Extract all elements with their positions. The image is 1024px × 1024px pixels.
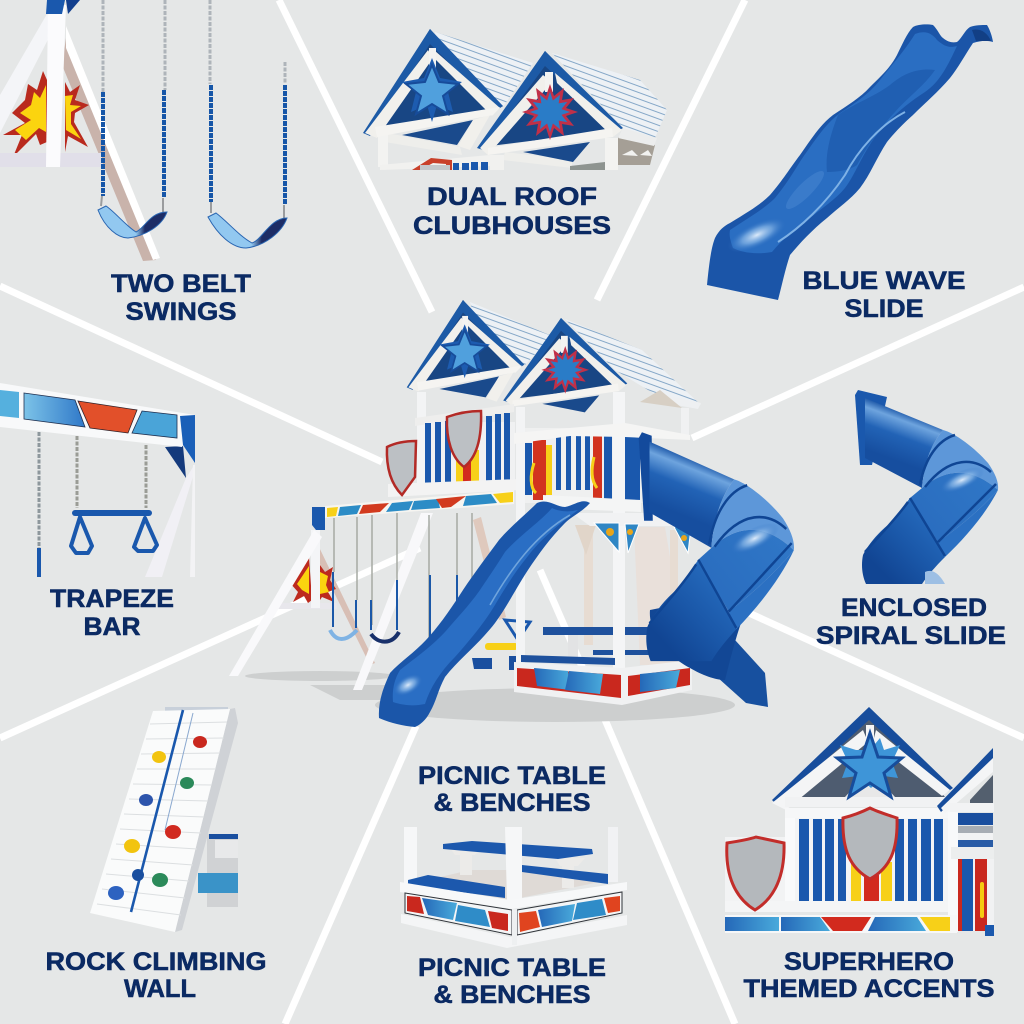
panel: picnic table and benches [400, 762, 627, 1009]
exit chute [717, 625, 768, 707]
trapeze handles and glider [472, 620, 530, 670]
swing frame [229, 513, 506, 690]
left gable [407, 300, 524, 402]
icon: small shield [387, 441, 416, 495]
heading: CLUBHOUSES [413, 212, 611, 240]
icon: comic burst [3, 71, 89, 157]
icon: picnic box [400, 827, 627, 948]
heading: PICNIC TABLE [418, 954, 606, 982]
heading [744, 948, 994, 1003]
right gable [503, 318, 627, 412]
heading [413, 183, 611, 240]
heading: DUAL ROOF [427, 183, 597, 211]
icon: large shield [843, 808, 897, 879]
heading [50, 585, 174, 641]
heading: WALL [124, 975, 196, 1003]
heading: SLIDE [844, 295, 924, 323]
heading: & BENCHES [434, 981, 590, 1009]
icon: right swing [208, 0, 287, 248]
icon: structure behind wall [165, 707, 238, 907]
icon: wave slide [707, 24, 993, 300]
tube [639, 432, 794, 661]
lower coil [650, 600, 742, 680]
right clubhouse walls [514, 392, 691, 692]
panel: dual roof clubhouses [363, 29, 667, 240]
icon: yellow handles [531, 457, 597, 493]
panel: superhero themed accents [725, 707, 994, 1003]
icon: left gable [363, 29, 503, 170]
icon: swing a-frame [0, 0, 160, 261]
heading [111, 270, 251, 326]
icon: wall tops [412, 155, 504, 170]
heading: SWINGS [126, 298, 236, 326]
panel: two belt swings [0, 0, 287, 326]
heading: TWO BELT [111, 270, 251, 298]
icon: climbing wall [90, 708, 238, 932]
heading [418, 762, 606, 817]
icon: beam [0, 383, 195, 577]
icon: gable and slats [725, 707, 959, 912]
left clubhouse walls [387, 392, 520, 497]
heading: PICNIC TABLE [418, 762, 606, 790]
icon: wave slide [379, 501, 590, 727]
ground shadow [245, 671, 735, 722]
icon: right gable [477, 51, 623, 170]
heading: ROCK CLIMBING [46, 948, 266, 976]
icon: pennants [594, 523, 691, 553]
roofs [470, 302, 701, 409]
icon: big shield [447, 411, 481, 467]
icon: back of roofs [435, 32, 667, 165]
icon: spiral slide [639, 432, 794, 707]
panel: trapeze bar [0, 383, 195, 641]
icon: comic band [725, 915, 957, 933]
heading: SUPERHERO [784, 948, 954, 976]
heading: TRAPEZE [50, 585, 174, 613]
main playset illustration [229, 300, 794, 727]
tower back: under deck [543, 525, 688, 665]
heading: ENCLOSED [841, 594, 987, 622]
heading [816, 594, 1006, 650]
heading: & BENCHES [434, 789, 590, 817]
icon: comic burst [290, 557, 336, 603]
beam [312, 490, 514, 530]
icon: right gable [937, 748, 994, 936]
panel: rock climbing wall [46, 707, 266, 1003]
swings [330, 513, 472, 642]
panel: blue wave slide [707, 24, 993, 323]
picnic base [514, 655, 692, 705]
heading: BLUE WAVE [802, 267, 966, 295]
icon: left swing [98, 0, 167, 238]
icon: spiral tube [855, 390, 998, 584]
heading [46, 948, 266, 1003]
heading: SPIRAL SLIDE [816, 622, 1006, 650]
heading: THEMED ACCENTS [744, 975, 994, 1003]
icon: small shield [727, 837, 784, 910]
heading [802, 267, 966, 323]
heading [418, 954, 606, 1009]
panel: enclosed spiral slide [816, 390, 1006, 650]
icon: trapeze [71, 436, 157, 553]
icon: chain [38, 432, 40, 577]
heading: BAR [84, 613, 140, 641]
